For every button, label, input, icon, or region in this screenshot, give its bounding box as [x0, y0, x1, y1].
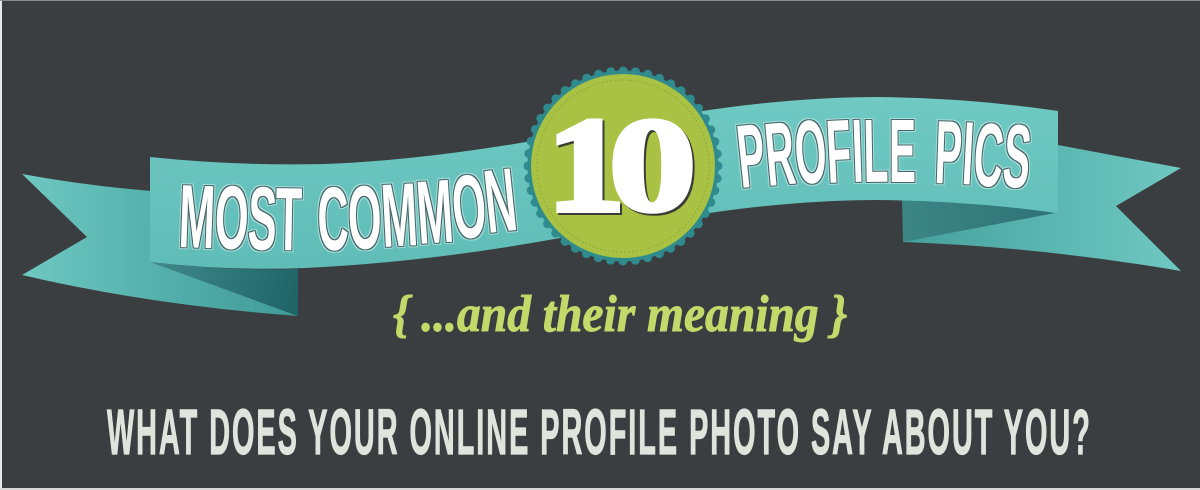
heading: profile pics: I	[850, 100, 865, 201]
badge number: 1	[547, 91, 625, 240]
heading: most common: T	[275, 168, 303, 270]
heading: most common	[177, 149, 521, 270]
heading: profile pics: I	[960, 103, 976, 204]
left ribbon tail	[22, 174, 298, 316]
badge green disc	[531, 74, 715, 258]
heading: profile pics	[733, 100, 1035, 208]
subtitle: { ...and their meaning }	[393, 286, 847, 343]
heading: profile pics: C	[971, 104, 1007, 206]
heading: profile pics: E	[889, 101, 916, 201]
badge	[528, 70, 718, 262]
ribbon banner	[22, 97, 1181, 316]
ribbon band left	[150, 136, 560, 269]
question line: WHAT DOES YOUR ONLINE PROFILE PHOTO SAY ABOUT YOU?	[107, 396, 1090, 468]
heading: most common: O	[346, 166, 383, 268]
heading: most common: N	[479, 149, 521, 252]
heading: profile pics: R	[761, 103, 799, 205]
heading: most common: O	[448, 155, 490, 258]
left fold shadow	[150, 262, 298, 316]
badge number shadow	[549, 93, 698, 242]
ribbon band right	[690, 97, 1058, 216]
heading: profile pics: P	[733, 104, 770, 207]
heading: profile pics: P	[933, 102, 964, 203]
heading: profile pics: S	[999, 105, 1035, 208]
badge number shadow: 0	[611, 93, 698, 241]
badge number shadow: 1	[549, 93, 627, 242]
badge scalloped edge	[528, 70, 718, 262]
right ribbon tail	[903, 145, 1181, 271]
badge number	[547, 91, 696, 240]
heading: most common: C	[317, 168, 350, 269]
heading: most common: O	[213, 166, 250, 268]
heading: most common: M	[379, 164, 420, 266]
heading: profile pics: O	[791, 101, 830, 203]
heading: most common: M	[177, 165, 217, 267]
badge number: 0	[609, 91, 696, 239]
heading: most common: M	[413, 160, 456, 263]
heading: profile pics: L	[863, 100, 889, 201]
heading: profile pics: F	[824, 101, 854, 202]
heading: most common: S	[246, 167, 279, 269]
right fold shadow	[902, 200, 1055, 242]
